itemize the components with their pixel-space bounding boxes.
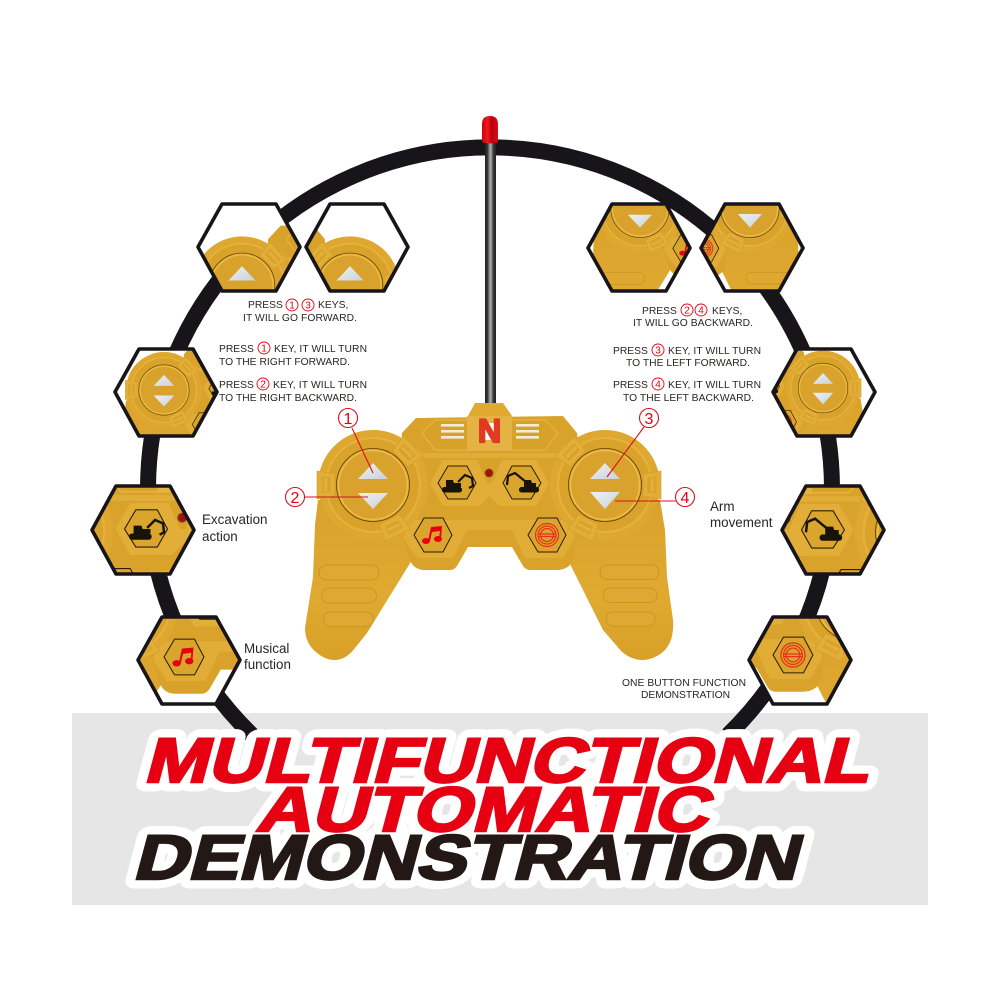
black ring arc xyxy=(148,147,832,735)
text: keys 2 and 4 backward: 4 xyxy=(698,306,704,316)
label: one button function: DEMONSTRATION xyxy=(641,690,730,701)
title line 1: MULTIFUNCTIONAL xyxy=(139,726,883,796)
label: arm movement: Arm xyxy=(710,499,735,514)
text: key 2 right backward: TO THE RIGHT BACKWARD. xyxy=(219,393,357,404)
text: key 4 left backward: TO THE LEFT BACKWARD. xyxy=(623,393,754,404)
text: keys 2 and 4 backward: 2 xyxy=(684,306,690,316)
text: key 1 right forward: PRESS xyxy=(219,344,254,355)
hex inset: left stick backward xyxy=(586,202,692,293)
label: arm movement xyxy=(710,499,773,530)
text: key 4 left backward: 4 xyxy=(655,380,661,390)
callout 2: 2 xyxy=(291,490,300,507)
callout 4 xyxy=(615,488,694,507)
label: arm movement: movement xyxy=(710,515,773,530)
label: musical function: function xyxy=(244,657,291,672)
right grip xyxy=(568,500,673,660)
top band xyxy=(422,420,558,450)
callout 3 xyxy=(607,408,658,477)
label: one button function: ONE BUTTON FUNCTION xyxy=(622,678,746,689)
text: key 4 left backward: PRESS xyxy=(613,380,648,391)
text: key 2 right backward: PRESS xyxy=(219,380,254,391)
callout 4: 4 xyxy=(681,490,690,507)
hex inset: excavation button xyxy=(90,484,196,576)
hex inset: one button xyxy=(747,615,853,706)
background band xyxy=(72,713,928,905)
text: keys 1 and 3 forward xyxy=(243,299,357,324)
hex inset: left stick forward xyxy=(196,202,302,293)
left stick xyxy=(317,430,428,541)
callout 1: 1 xyxy=(344,411,353,428)
callout 3: 3 xyxy=(645,411,654,428)
text: key 1 right forward: TO THE RIGHT FORWARD. xyxy=(219,357,350,368)
music button xyxy=(414,518,452,552)
text: keys 2 and 4 backward: IT WILL GO BACKWARD. xyxy=(633,318,753,329)
label: musical function: Musical xyxy=(244,641,289,656)
hex inset: music button xyxy=(136,615,242,706)
text: keys 1 and 3 forward: 1 xyxy=(289,300,295,312)
centre plate xyxy=(398,416,582,570)
controller xyxy=(305,403,673,660)
title outline: DEMONSTRATION xyxy=(128,822,812,892)
left grip xyxy=(305,500,412,660)
callout 2 xyxy=(286,488,368,507)
text: key 1 right forward xyxy=(219,342,367,368)
text: key 2 right backward: 2 xyxy=(260,380,266,390)
controller body xyxy=(305,403,673,660)
hex inset: left stick xyxy=(113,347,219,438)
antenna xyxy=(482,116,498,406)
title xyxy=(128,726,883,892)
hex inset: right stick backward xyxy=(699,202,805,293)
hex inset: arm button xyxy=(780,484,886,576)
label: musical function xyxy=(244,641,291,672)
text: key 2 right backward: KEY, IT WILL TURN xyxy=(273,380,367,391)
text: key 3 left forward: PRESS xyxy=(613,346,648,357)
arm button xyxy=(482,460,549,506)
label: one button function xyxy=(622,678,746,701)
text: keys 2 and 4 backward: KEYS, xyxy=(712,306,742,317)
vent stripes xyxy=(441,424,539,439)
text: key 1 right forward: KEY, IT WILL TURN xyxy=(274,344,367,355)
antenna base xyxy=(468,403,512,416)
title line 2: AUTOMATIC xyxy=(251,774,722,844)
label: excavation action xyxy=(202,512,268,544)
text: key 3 left forward: TO THE LEFT FORWARD. xyxy=(626,358,750,369)
text: key 3 left forward: KEY, IT WILL TURN xyxy=(668,346,761,357)
text: keys 2 and 4 backward xyxy=(633,304,753,329)
title outline: MULTIFUNCTIONAL xyxy=(139,726,883,796)
title outline: AUTOMATIC xyxy=(251,774,722,844)
label: excavation action: action xyxy=(202,529,238,544)
text: keys 1 and 3 forward: 3 xyxy=(305,300,311,312)
text: key 4 left backward xyxy=(613,378,761,404)
text: key 3 left forward: 3 xyxy=(655,346,661,356)
label: excavation action: Excavation xyxy=(202,512,268,527)
title line 3: DEMONSTRATION xyxy=(128,822,812,892)
text: keys 1 and 3 forward: IT WILL GO FORWARD. xyxy=(243,313,357,324)
text: key 2 right backward xyxy=(219,378,367,404)
LED xyxy=(485,469,493,477)
text: key 4 left backward: KEY, IT WILL TURN xyxy=(668,380,761,391)
N logo: N xyxy=(478,413,501,449)
hex inset: right stick xyxy=(771,347,877,438)
callout 1 xyxy=(338,408,373,473)
hex inset: right stick forward xyxy=(304,202,410,293)
text: keys 1 and 3 forward: PRESS xyxy=(248,300,283,311)
one button xyxy=(528,518,566,552)
text: key 3 left forward xyxy=(613,344,761,369)
title outline xyxy=(128,726,883,892)
text: keys 1 and 3 forward: KEYS, xyxy=(318,300,348,311)
excavation button xyxy=(430,460,497,506)
right stick xyxy=(550,430,661,541)
text: keys 2 and 4 backward: PRESS xyxy=(642,306,677,317)
text: key 1 right forward: 1 xyxy=(261,344,267,354)
